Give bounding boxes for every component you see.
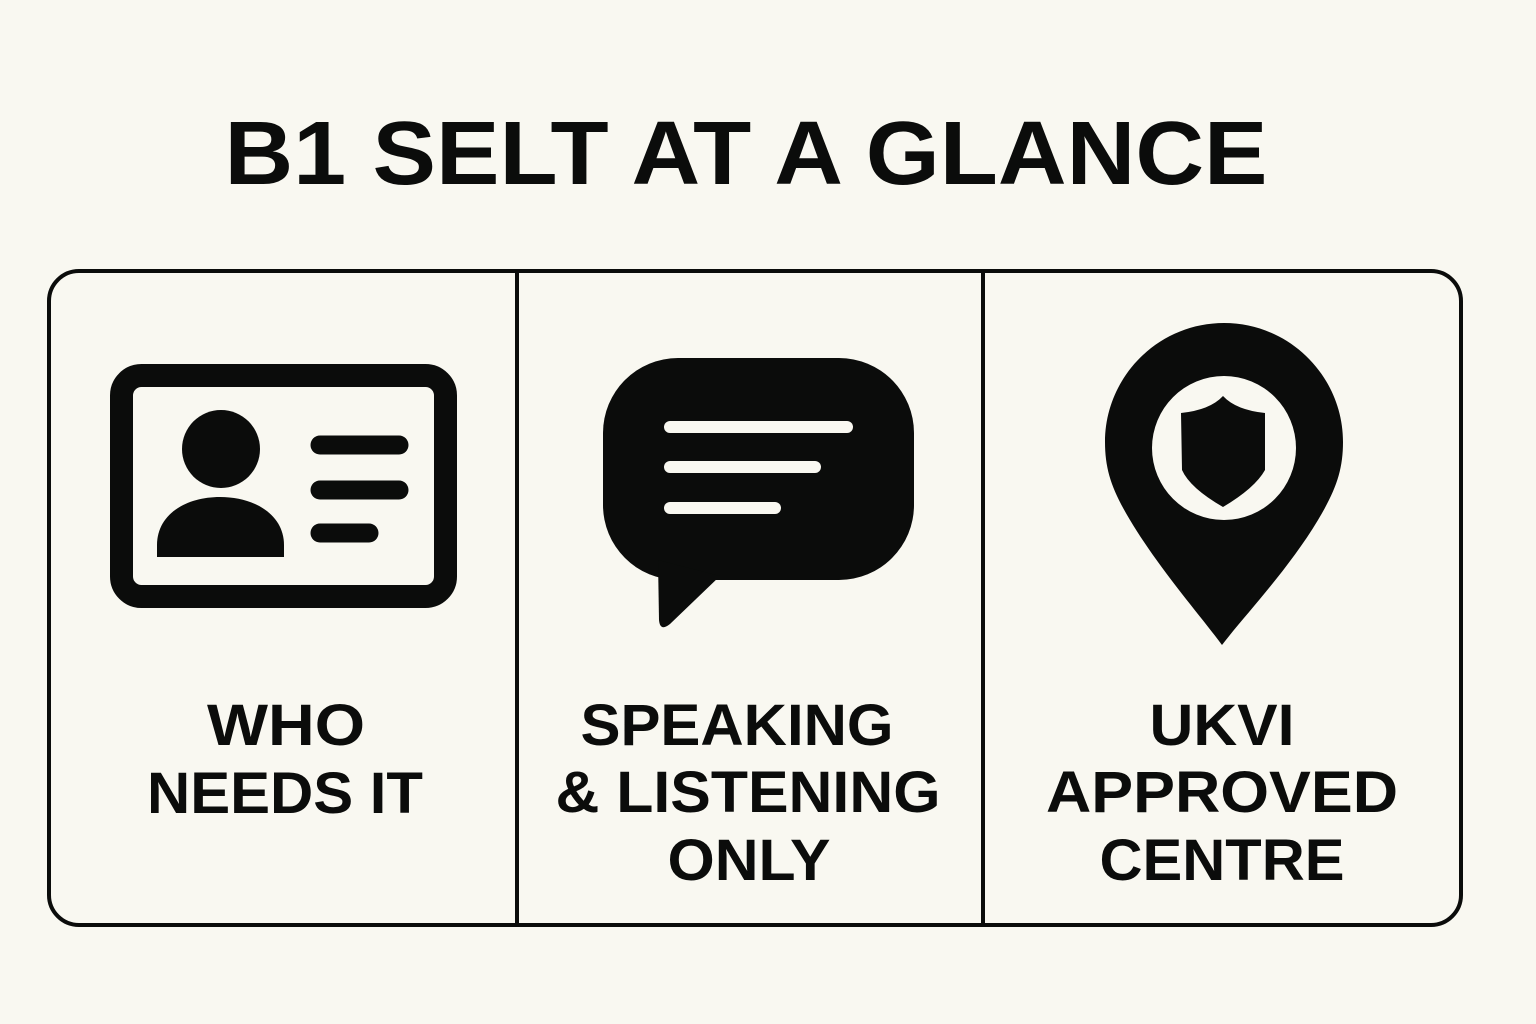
label: UKVI approved centre: UKVI <box>1150 693 1294 758</box>
label: UKVI approved centre <box>1046 693 1398 893</box>
label: who needs it: WHO <box>207 693 365 758</box>
icon: speech bubble <box>603 358 914 627</box>
title: B1 SELT AT A GLANCE <box>224 104 1268 204</box>
label: speaking & listening only: SPEAKING <box>580 693 894 758</box>
label: who needs it: NEEDS IT <box>147 761 423 826</box>
icon: location pin with shield <box>1105 323 1343 645</box>
label: UKVI approved centre: CENTRE <box>1100 828 1344 893</box>
label: UKVI approved centre: APPROVED <box>1046 760 1398 825</box>
panel: UKVI approved centre <box>1046 323 1398 893</box>
label: who needs it <box>147 693 423 826</box>
icon: ID card <box>122 376 446 596</box>
label: speaking & listening only <box>556 693 940 893</box>
panel: who needs it <box>122 376 446 826</box>
panel: speaking and listening <box>556 358 940 893</box>
panel container <box>49 271 1461 925</box>
label: speaking & listening only: ONLY <box>668 828 830 893</box>
label: speaking & listening only: & LISTENING <box>556 760 940 825</box>
